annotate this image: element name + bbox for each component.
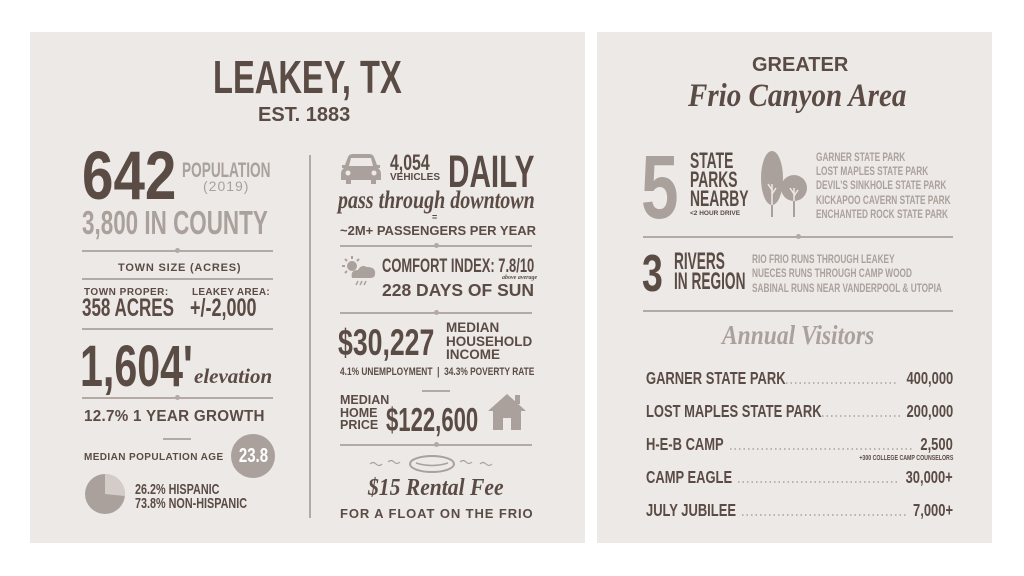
- right title: GREATER: [752, 54, 848, 76]
- median home price: PRICE: [340, 418, 378, 432]
- panel: Leakey stats: [30, 32, 585, 543]
- days of sun: 228 DAYS OF SUN: [382, 280, 534, 300]
- population year: (2019): [203, 178, 249, 194]
- row: Camp Eagle: CAMP EAGLE: [646, 467, 732, 487]
- river list: SABINAL RUNS NEAR VANDERPOOL & UTOPIA: [752, 283, 942, 295]
- row: Camp Eagle: [646, 467, 953, 487]
- town size heading: TOWN SIZE (ACRES): [118, 262, 241, 274]
- comfort index: COMFORT INDEX: 7.8/10: [382, 256, 534, 277]
- median home price: [340, 393, 389, 432]
- pie chart: ethnicity: 26.2% HISPANIC: [135, 481, 219, 498]
- population number: 642: [82, 137, 176, 214]
- park list: [816, 152, 951, 221]
- icon: trees: [761, 151, 807, 217]
- row: HEB camp: 2,500: [921, 434, 953, 454]
- title: LEAKEY, TX: [213, 51, 402, 103]
- icon: float raft: [370, 455, 492, 473]
- icon: car: [341, 154, 381, 184]
- text: NEARBY: [690, 186, 749, 211]
- text: Frio Canyon Area: [688, 78, 906, 114]
- river list: [752, 254, 942, 295]
- pass through downtown: pass through downtown: [338, 187, 535, 214]
- text: DAILY: [448, 146, 534, 197]
- growth: 12.7% 1 YEAR GROWTH: [84, 408, 265, 425]
- rental fee: $15 Rental Fee: [368, 475, 504, 501]
- population label: POPULATION: [182, 159, 270, 182]
- text: <2 HOUR DRIVE: [690, 210, 740, 217]
- park list: DEVIL'S SINKHOLE STATE PARK: [816, 180, 946, 192]
- river list: NUECES RUNS THROUGH CAMP WOOD: [752, 268, 912, 280]
- park list: ENCHANTED ROCK STATE PARK: [816, 209, 948, 221]
- row: Lost Maples: 200,000: [906, 401, 953, 421]
- subtitle: EST. 1883: [258, 104, 350, 126]
- elevation: 1,604': [80, 334, 193, 399]
- row: Camp Eagle: 30,000+: [906, 467, 953, 487]
- passengers: ~2M+ PASSENGERS PER YEAR: [340, 223, 536, 238]
- median age: 23.8: [238, 445, 268, 467]
- text: HOUSEHOLD: [446, 334, 532, 348]
- text: 358 ACRES: [82, 294, 174, 322]
- pie chart: ethnicity: 73.8% NON-HISPANIC: [135, 495, 247, 512]
- text: VEHICLES: [390, 172, 440, 183]
- text: STATE: [690, 148, 733, 173]
- median home price: MEDIAN: [340, 393, 389, 407]
- text: =: [432, 212, 437, 222]
- visitors table: +300 COLLEGE CAMP COUNSELORS: [859, 455, 953, 462]
- text: elevation: [194, 364, 272, 388]
- row: July Jubilee: 7,000+: [913, 500, 953, 520]
- pie chart: ethnicity: [85, 474, 247, 514]
- text: PARKS: [690, 167, 737, 192]
- row: Garner: 400,000: [906, 368, 953, 388]
- unemployment and poverty: 4.1% UNEMPLOYMENT | 34.3% POVERTY RATE: [340, 366, 534, 378]
- text: FOR A FLOAT ON THE FRIO: [340, 506, 534, 521]
- row: Garner: GARNER STATE PARK: [646, 368, 786, 388]
- row: HEB camp: H-E-B CAMP: [646, 434, 724, 454]
- text: MEDIAN: [446, 320, 499, 335]
- river list: RIO FRIO RUNS THROUGH LEAKEY: [752, 254, 895, 266]
- park list: GARNER STATE PARK: [816, 152, 905, 164]
- row: July Jubilee: JULY JUBILEE: [646, 500, 736, 520]
- text: RIVERS: [674, 248, 725, 275]
- annual visitors heading: Annual Visitors: [722, 320, 874, 350]
- text: IN REGION: [674, 268, 745, 295]
- median age: [84, 434, 275, 478]
- visitors table: [646, 368, 954, 520]
- icon: weather: [342, 256, 376, 286]
- state parks count: 5: [641, 138, 679, 238]
- text: +/-2,000: [190, 294, 257, 322]
- leakey area: LEAKEY AREA:: [192, 287, 270, 298]
- icon: house: [488, 394, 526, 430]
- county population: 3,800 IN COUNTY: [82, 204, 268, 241]
- row: HEB camp: [646, 434, 953, 454]
- row: Lost Maples: LOST MAPLES STATE PARK: [646, 401, 822, 421]
- panel: Greater Frio Canyon Area: [597, 32, 992, 543]
- vehicles count: 4,054: [390, 150, 430, 175]
- median home price: HOME: [340, 406, 378, 420]
- park list: LOST MAPLES STATE PARK: [816, 166, 928, 178]
- text: $122,600: [386, 401, 478, 438]
- row: Garner: [646, 368, 953, 388]
- median income: $30,227: [338, 322, 434, 363]
- dot leaders: [730, 382, 912, 516]
- rivers count: 3: [642, 245, 663, 303]
- text: above average: [502, 275, 537, 281]
- town proper: TOWN PROPER:: [84, 287, 169, 298]
- park list: KICKAPOO CAVERN STATE PARK: [816, 195, 951, 207]
- row: July Jubilee: [646, 500, 953, 520]
- row: Lost Maples: [646, 401, 953, 421]
- text: INCOME: [446, 347, 500, 362]
- median age: MEDIAN POPULATION AGE: [84, 452, 224, 463]
